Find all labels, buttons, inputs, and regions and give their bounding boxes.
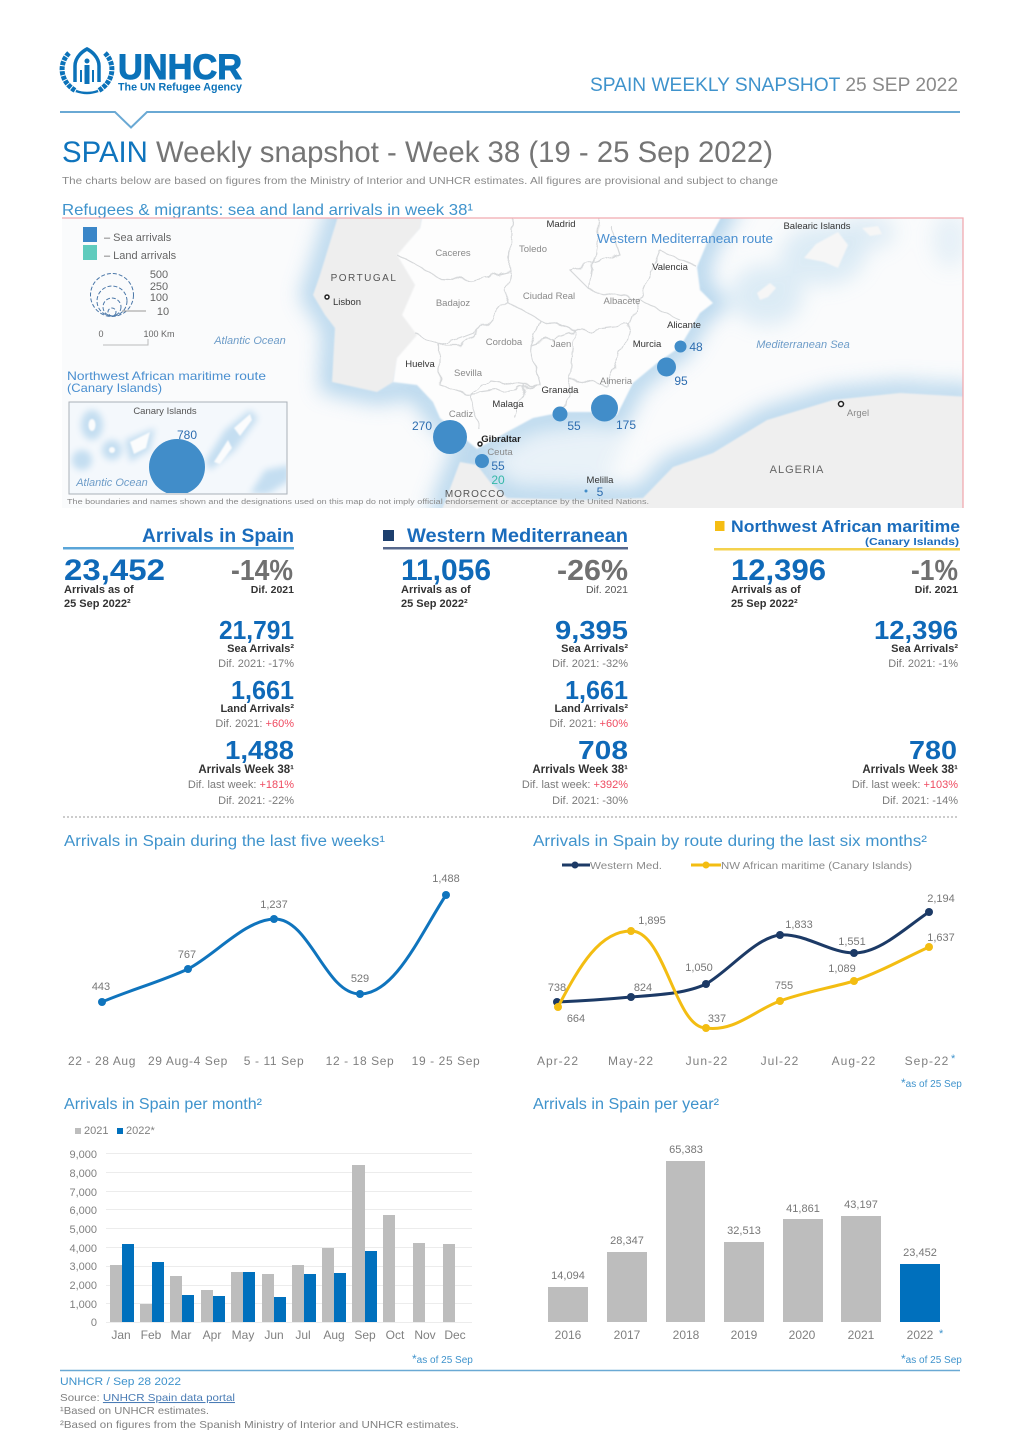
x axis: 2022	[907, 1328, 934, 1342]
total: 25 Sep 2022²	[64, 598, 131, 610]
values: 41,861	[786, 1203, 820, 1215]
map labels: Balearic Islands	[783, 221, 851, 232]
sea arrivals: Sea Arrivals²	[561, 643, 628, 655]
data labels: 824	[634, 982, 652, 994]
bar chart: per year	[548, 1144, 962, 1366]
map labels: Caceres	[435, 248, 471, 259]
line chart: by route	[537, 860, 962, 1090]
map labels: Gibraltar	[481, 434, 521, 445]
data labels: 664	[567, 1013, 585, 1025]
scale bar: 0	[98, 329, 104, 339]
note: *as of 25 Sep	[901, 1352, 962, 1366]
grid and y axis: 5,000	[69, 1224, 97, 1236]
legend: sea arrivals: – Sea arrivals	[104, 232, 172, 244]
grid and y axis: 0	[91, 1317, 97, 1329]
map labels: Malaga	[492, 399, 524, 410]
grid and y axis: 8,000	[69, 1168, 97, 1180]
map labels: Ciudad Real	[523, 291, 575, 302]
land: North Africa	[440, 393, 970, 515]
bar chart: per month	[69, 1125, 473, 1366]
land: Portugal	[313, 210, 423, 392]
week arrivals: Dif. last week: +181%	[188, 779, 294, 791]
total: Arrivals as of	[731, 584, 801, 596]
map labels: Mediterranean Sea	[756, 339, 850, 351]
legend	[83, 227, 177, 345]
legend: proportional circles	[90, 269, 169, 318]
canary route sublabel: (Canary Islands)	[67, 381, 162, 395]
land arrivals: 1,661	[565, 675, 628, 705]
total: 23,452	[64, 554, 165, 587]
canary route label: Northwest African maritime route	[67, 369, 266, 383]
map labels: Granada	[542, 385, 579, 396]
x axis: Aug-22	[832, 1054, 876, 1068]
map labels: Murcia	[633, 339, 662, 350]
line chart: last five weeks: 29 Aug-4 Sep	[148, 1054, 228, 1068]
line chart: last five weeks: 767	[178, 949, 196, 961]
series: Western Med	[553, 908, 933, 1006]
map labels: Cadiz	[449, 409, 473, 420]
sea arrivals: Dif. 2021: -1%	[888, 658, 958, 670]
bubble values: 20	[491, 473, 505, 487]
map disclaimer: The boundaries and names shown and the designations used on this map do not imply official endorsement or acceptance by the United Nations.	[67, 499, 649, 506]
x axis	[555, 1328, 944, 1342]
week arrivals	[852, 735, 958, 807]
line chart: last five weeks: 443	[92, 981, 110, 993]
heading: six months chart: Arrivals in Spain by route during the last six months²	[533, 833, 927, 850]
legend: proportional circles: 10	[157, 306, 169, 318]
total: Arrivals as of	[401, 584, 471, 596]
x axis: Feb	[141, 1328, 162, 1342]
sea arrivals: 21,791	[219, 615, 294, 645]
total: 11,056	[401, 554, 491, 587]
grid and y axis: 3,000	[69, 1261, 97, 1273]
values	[551, 1144, 937, 1282]
bars	[548, 1161, 940, 1322]
week arrivals	[522, 735, 628, 807]
x axis: Sep-22	[905, 1054, 949, 1068]
total	[731, 554, 958, 610]
legend: 2021	[84, 1125, 108, 1137]
heading: per month chart: Arrivals in Spain per month²	[64, 1096, 262, 1113]
x axis: 2019	[731, 1328, 758, 1342]
grid and y axis: 9,000	[69, 1149, 97, 1161]
map labels	[213, 219, 869, 500]
values: 23,452	[903, 1247, 937, 1259]
bubble values: 55	[567, 419, 581, 433]
map labels: Alicante	[667, 320, 701, 331]
scale bar	[98, 329, 175, 345]
footnote 1: ¹Based on UNHCR estimates.	[60, 1405, 209, 1417]
map labels: Sevilla	[454, 368, 483, 379]
x axis: Dec	[444, 1328, 466, 1342]
map labels: Atlantic Ocean	[213, 335, 286, 347]
heading: Western Mediterranean	[407, 526, 628, 547]
x axis: Jan	[111, 1328, 131, 1342]
x axis: May	[232, 1328, 254, 1342]
map labels: Almeria	[600, 376, 633, 387]
heading: per year chart: Arrivals in Spain per year²	[533, 1096, 719, 1113]
week arrivals: Dif. 2021: -22%	[218, 795, 294, 807]
land arrivals: 1,661	[231, 675, 294, 705]
source: Source: UNHCR Spain data portal	[60, 1392, 235, 1404]
title: SPAIN Weekly snapshot - Week 38 (19 - 25 Sep 2022)	[62, 136, 773, 169]
data labels: 1,637	[927, 932, 955, 944]
panel: arrivals in Spain	[63, 526, 294, 807]
icon: laurel and sheltering hands	[62, 49, 112, 93]
total: -1%	[911, 555, 958, 587]
x axis: Nov	[414, 1328, 436, 1342]
x axis: Jul	[295, 1328, 311, 1342]
series: 2022	[122, 1244, 377, 1322]
values: 14,094	[551, 1270, 585, 1282]
grid and y axis: 7,000	[69, 1187, 97, 1199]
scale bar: 100 Km	[143, 329, 175, 339]
land: Spain	[393, 210, 725, 449]
values: 32,513	[727, 1225, 761, 1237]
bubbles: arrivals by province	[433, 340, 686, 492]
heading: Northwest African maritime	[731, 517, 960, 536]
line chart: last five weeks: 529	[351, 973, 369, 985]
map labels: Madrid	[546, 219, 576, 230]
x axis: Mar	[171, 1328, 191, 1342]
line chart: last five weeks: 1,488	[432, 873, 460, 885]
values: 65,383	[669, 1144, 703, 1156]
legend	[562, 860, 912, 872]
x axis: 2016	[555, 1328, 582, 1342]
data labels: 738	[548, 982, 566, 994]
week arrivals: Arrivals Week 38¹	[198, 764, 294, 776]
heading: Arrivals in Spain	[142, 526, 294, 547]
header right label: SPAIN WEEKLY SNAPSHOT 25 SEP 2022	[590, 75, 958, 96]
x axis: Apr-22	[537, 1054, 579, 1068]
bubble values	[412, 340, 703, 499]
week arrivals: Dif. last week: +392%	[522, 779, 628, 791]
sea arrivals: Dif. 2021: -17%	[218, 658, 294, 670]
land arrivals: Dif. 2021: +60%	[215, 718, 294, 730]
week arrivals: Dif. 2021: -14%	[882, 795, 958, 807]
week arrivals: 780	[909, 735, 957, 765]
header rule with notch	[60, 112, 960, 128]
x axis: 2018	[673, 1328, 700, 1342]
data labels: 1,895	[638, 915, 666, 927]
legend	[75, 1125, 155, 1137]
data labels: 1,089	[828, 963, 856, 975]
x axis: *	[939, 1328, 944, 1340]
x axis: *	[951, 1053, 956, 1065]
week arrivals: Arrivals Week 38¹	[532, 764, 628, 776]
x axis: 2021	[848, 1328, 875, 1342]
data labels: 1,833	[785, 919, 813, 931]
sea arrivals	[218, 615, 294, 670]
legend: NW African maritime (Canary Islands)	[721, 860, 912, 872]
sea arrivals: Sea Arrivals²	[227, 643, 294, 655]
map labels: Albacete	[604, 296, 640, 307]
bubble values: 5	[597, 485, 604, 499]
x axis: Apr	[203, 1328, 221, 1342]
x axis: 2020	[789, 1328, 816, 1342]
map labels: Jaen	[551, 339, 571, 350]
total: Dif. 2021	[915, 584, 958, 596]
land arrivals: Land Arrivals²	[220, 703, 294, 715]
inset: Canary Islands: Atlantic Ocean	[75, 477, 148, 489]
map labels: Melilla	[587, 475, 614, 486]
total: Arrivals as of	[64, 584, 134, 596]
total: 25 Sep 2022²	[731, 598, 798, 610]
x axis: Jun	[264, 1328, 284, 1342]
legend: land arrivals: – Land arrivals	[104, 250, 177, 262]
heading: (Canary Islands)	[865, 536, 959, 548]
sea glow	[313, 210, 975, 515]
map labels: Huelva	[405, 359, 435, 370]
bubble values: 48	[689, 340, 703, 354]
note: *as of 25 Sep	[901, 1076, 962, 1090]
panel: Western Mediterranean	[383, 526, 628, 807]
sea arrivals	[874, 615, 958, 670]
land: Balearic Islands	[804, 232, 848, 268]
bubble values: 95	[674, 374, 688, 388]
subtitle: The charts below are based on figures from the Ministry of Interior and UNHCR estimates. All figures are provisional and subject to change	[62, 175, 778, 187]
inset: Canary Islands: 780	[177, 428, 197, 442]
total: -14%	[231, 555, 293, 587]
map labels: Valencia	[652, 262, 689, 273]
total: Dif. 2021	[251, 584, 294, 596]
week arrivals: Arrivals Week 38¹	[862, 764, 958, 776]
series: NW African maritime	[554, 927, 933, 1032]
map labels: Western Mediterranean route	[597, 232, 773, 246]
grid and y axis: 2,000	[69, 1280, 97, 1292]
tagline: The UN Refugee Agency	[118, 82, 243, 94]
heading	[715, 517, 960, 548]
total	[64, 554, 294, 610]
note: *as of 25 Sep	[412, 1352, 473, 1366]
legend: proportional circles: 500	[150, 269, 168, 281]
footer	[60, 1376, 459, 1431]
week arrivals: Dif. last week: +103%	[852, 779, 958, 791]
inset: Canary Islands: Canary Islands	[133, 406, 197, 417]
x axis: Aug	[323, 1328, 345, 1342]
sea arrivals: Dif. 2021: -32%	[552, 658, 628, 670]
week arrivals: 708	[578, 735, 628, 765]
total: 25 Sep 2022²	[401, 598, 468, 610]
line chart: last five weeks: 12 - 18 Sep	[326, 1054, 394, 1068]
line chart: last five weeks	[68, 873, 480, 1068]
map labels: ALGERIA	[770, 464, 824, 476]
date line: UNHCR / Sep 28 2022	[60, 1376, 181, 1388]
land arrivals	[549, 675, 628, 730]
legend: proportional circles: 250	[150, 281, 168, 293]
bubble values: 270	[412, 419, 432, 433]
data labels: 1,551	[838, 936, 866, 948]
x axis: Oct	[386, 1328, 405, 1342]
map labels: PORTUGAL	[331, 273, 397, 284]
grid and y axis: 4,000	[69, 1243, 97, 1255]
land arrivals: Dif. 2021: +60%	[549, 718, 628, 730]
legend: Western Med.	[590, 860, 662, 872]
x axis: Sep	[354, 1328, 376, 1342]
land arrivals	[215, 675, 294, 730]
land arrivals: Land Arrivals²	[554, 703, 628, 715]
map border	[62, 218, 963, 508]
map labels: Badajoz	[436, 298, 470, 309]
heading: five weeks chart: Arrivals in Spain during the last five weeks¹	[64, 833, 385, 850]
map labels: Argel	[847, 408, 869, 419]
map markers: cities	[325, 295, 844, 446]
legend: 2022*	[126, 1125, 155, 1137]
logo: UNHCR	[62, 48, 243, 94]
series: 2021	[110, 1165, 455, 1322]
line chart: last five weeks: 19 - 25 Sep	[412, 1054, 480, 1068]
total	[401, 554, 628, 610]
panel: Northwest African maritime	[714, 517, 960, 807]
values: 28,347	[610, 1235, 644, 1247]
heading: map: Refugees & migrants: sea and land arrivals in week 38¹	[62, 202, 473, 219]
line chart: last five weeks: 1,237	[260, 899, 288, 911]
map labels: Cordoba	[486, 337, 523, 348]
total: 12,396	[731, 554, 826, 587]
data labels: 337	[708, 1013, 726, 1025]
wordmark: UNHCR	[118, 48, 242, 87]
data labels	[548, 893, 955, 1025]
data labels: 755	[775, 980, 793, 992]
bubble values: 55	[491, 459, 505, 473]
sea arrivals: 12,396	[874, 615, 958, 645]
total: -26%	[557, 555, 628, 587]
week arrivals: 1,488	[225, 735, 294, 765]
map labels: Lisbon	[333, 297, 361, 308]
bubble values: 175	[616, 418, 636, 432]
x axis: Jul-22	[761, 1054, 799, 1068]
map labels: Toledo	[519, 244, 547, 255]
week arrivals	[188, 735, 294, 807]
map labels: MOROCCO	[445, 489, 505, 500]
data labels: 1,050	[685, 962, 713, 974]
x axis	[111, 1328, 466, 1342]
data labels: 2,194	[927, 893, 955, 905]
x axis: May-22	[608, 1054, 654, 1068]
legend: proportional circles: 100	[150, 292, 168, 304]
province borders	[397, 218, 697, 430]
sea arrivals: Sea Arrivals²	[891, 643, 958, 655]
sea arrivals	[552, 615, 628, 670]
panel: map	[62, 210, 975, 515]
x axis: Jun-22	[686, 1054, 728, 1068]
total: Dif. 2021	[586, 584, 628, 596]
grid and y axis: 6,000	[69, 1205, 97, 1217]
x axis: 2017	[614, 1328, 641, 1342]
week arrivals: Dif. 2021: -30%	[552, 795, 628, 807]
x axis	[537, 1053, 956, 1068]
values: 43,197	[844, 1199, 878, 1211]
line chart: last five weeks: 22 - 28 Aug	[68, 1054, 136, 1068]
sea arrivals: 9,395	[555, 615, 628, 645]
footnote 2: ²Based on figures from the Spanish Ministry of Interior and UNHCR estimates.	[60, 1419, 459, 1431]
grid and y axis: 1,000	[69, 1299, 97, 1311]
grid and y axis	[69, 1149, 472, 1329]
line chart: last five weeks: 5 - 11 Sep	[244, 1054, 304, 1068]
map labels: Ceuta	[487, 447, 513, 458]
inset: Canary Islands	[69, 402, 290, 495]
